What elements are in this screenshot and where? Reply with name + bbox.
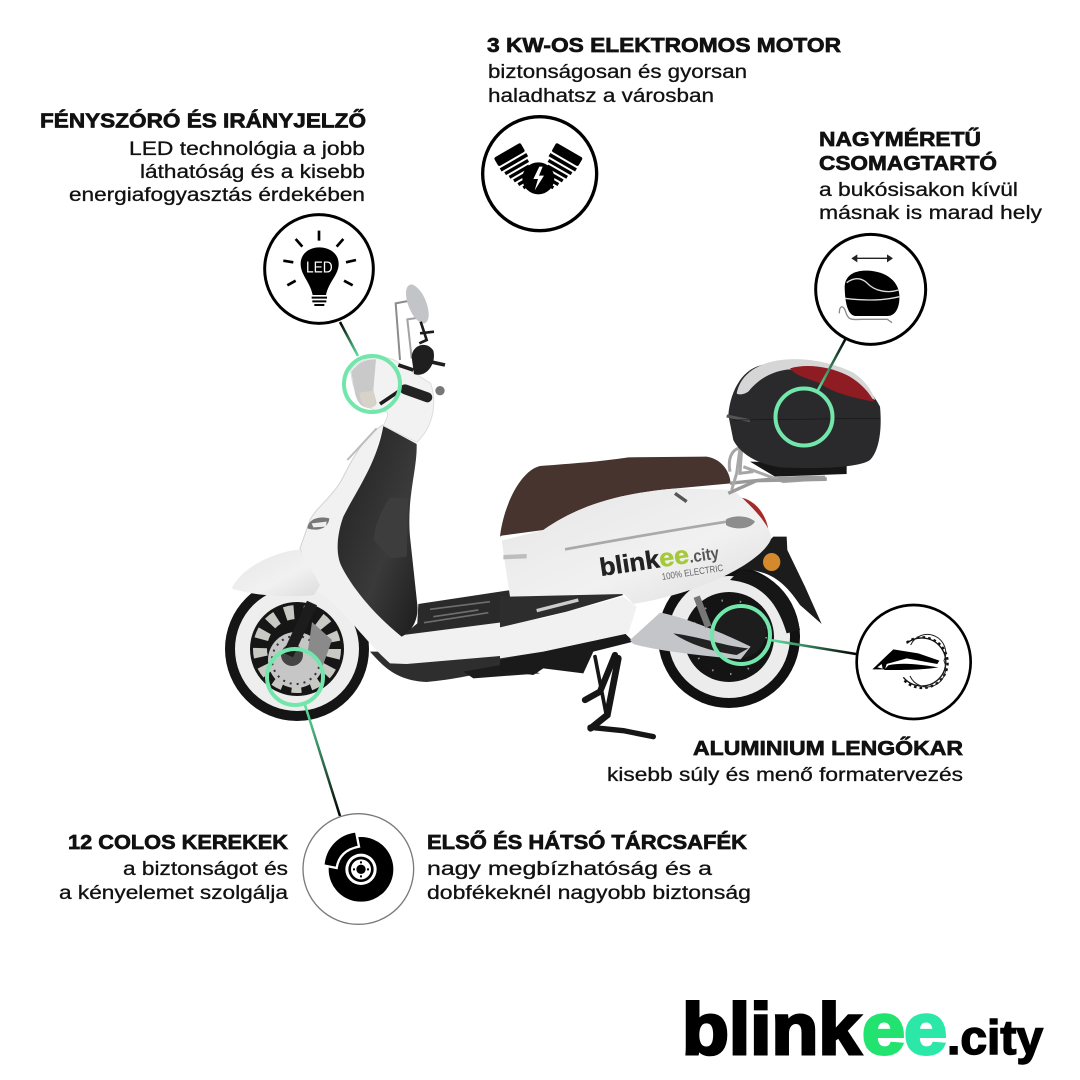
text block: motor: 3 KW-OS ELEKTROMOS MOTOR <box>487 34 841 57</box>
logo: blinkee.city: e <box>904 990 947 1070</box>
floorboard <box>403 587 540 635</box>
badge <box>307 517 329 530</box>
text block: headlight: energiafogyasztás érdekében <box>69 185 365 206</box>
connector: swingarm <box>770 640 856 654</box>
inner black panel <box>338 426 417 637</box>
text block: wheels: a kényelemet szolgálja <box>59 883 289 904</box>
black lower frame <box>500 628 633 675</box>
text block: top box: NAGYMÉRETŰ <box>819 128 981 151</box>
text block: wheels <box>59 831 289 904</box>
icon: LED bulb <box>265 215 373 323</box>
text block: motor <box>487 34 841 107</box>
text block: brakes: ELSŐ ÉS HÁTSÓ TÁRCSAFÉK <box>427 830 747 854</box>
text block: top box: CSOMAGTARTÓ <box>819 151 997 175</box>
swingarm <box>630 613 751 659</box>
icon: swingarm <box>857 605 971 719</box>
text block: headlight: FÉNYSZÓRÓ ÉS IRÁNYJELZŐ <box>40 108 366 132</box>
icon: LED bulb: LED <box>306 260 333 277</box>
text block: brakes: nagy megbízhatóság és a <box>427 859 713 880</box>
amber indicator <box>763 553 780 571</box>
logo: blinkee.city <box>682 990 1043 1070</box>
text block: swingarm: ALUMINIUM LENGŐKAR <box>693 737 963 760</box>
text block: top box <box>819 128 1043 224</box>
tail light <box>740 497 768 530</box>
scooter front section <box>232 357 540 682</box>
scooter body logo <box>598 536 724 592</box>
text block: headlight: láthatóság és a kisebb <box>140 162 365 183</box>
text block: swingarm: kisebb súly és menő formatervezés <box>607 765 963 786</box>
rear body panel <box>502 488 771 604</box>
scooter rear section <box>500 448 825 675</box>
scooter body logo: ee <box>657 541 691 573</box>
text block: headlight: LED technológia a jobb <box>129 139 365 160</box>
top box <box>727 359 881 493</box>
connector: top box <box>818 338 846 390</box>
logo: blinkee.city: .city <box>947 1012 1043 1065</box>
text block: top box: másnak is marad hely <box>819 203 1043 224</box>
logo: blinkee.city: e <box>862 990 905 1070</box>
front fender <box>232 549 320 596</box>
text block: swingarm <box>607 737 963 786</box>
headlight <box>351 359 377 407</box>
mirror and controls <box>396 281 445 375</box>
icon: electric motor <box>483 117 597 231</box>
highlight ring: swingarm <box>712 606 770 664</box>
text block: wheels: 12 COLOS KEREKEK <box>68 831 288 854</box>
text block: brakes: dobfékeknél nagyobb biztonság <box>427 883 751 904</box>
scooter illustration <box>225 281 881 737</box>
underbody <box>370 652 540 682</box>
front wheel <box>225 577 369 721</box>
highlight ring: top box <box>776 388 832 446</box>
text block: headlight <box>40 108 366 206</box>
icon: brake disc <box>303 814 414 924</box>
connector: front brake <box>305 705 340 816</box>
logo: blinkee.city: blink <box>682 990 862 1070</box>
seat <box>500 457 731 537</box>
white floor link <box>500 597 637 658</box>
text block: wheels: a biztonságot és <box>123 859 288 880</box>
rear rack <box>730 477 825 483</box>
kickstand <box>585 655 653 737</box>
connector: headlight <box>340 322 358 356</box>
head nacelle <box>351 357 434 442</box>
text block: motor: biztonságosan és gyorsan <box>488 62 747 83</box>
text block: brakes <box>427 830 751 904</box>
grip and lever <box>380 392 398 404</box>
highlight ring: headlight <box>344 356 400 412</box>
text block: motor: haladhatsz a városban <box>488 86 714 107</box>
rear wheel <box>658 566 800 708</box>
rear mudguard <box>730 537 822 624</box>
highlight ring: front wheel <box>267 649 323 705</box>
scooter body logo: blink <box>598 545 661 582</box>
white legshield and floor strip <box>300 425 540 664</box>
icon: top box <box>816 234 926 344</box>
scooter body logo: 100% ELECTRIC <box>661 563 724 583</box>
text block: top box: a bukósisakon kívül <box>819 180 1018 201</box>
scooter body logo: .city <box>688 543 721 567</box>
